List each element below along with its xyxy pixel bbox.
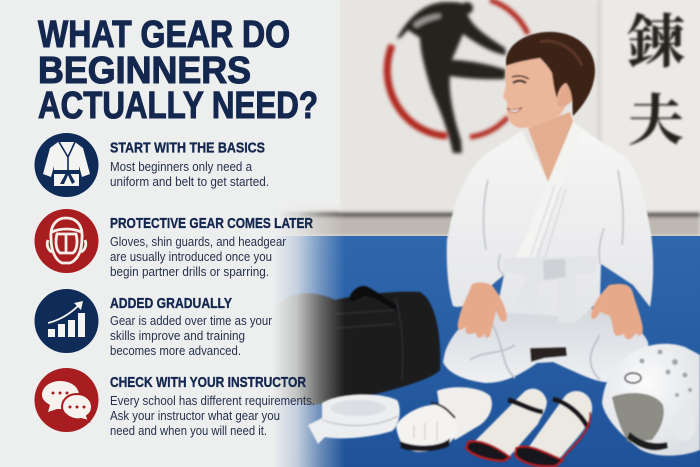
pants	[443, 308, 648, 383]
title: BEGINNERS	[38, 50, 251, 92]
left text panel fade	[0, 0, 345, 467]
icon: chat bubbles	[34, 368, 98, 432]
photo: shin guards	[466, 389, 592, 467]
step 3: added gradually: becomes more advanced.	[110, 344, 241, 358]
step 1: start with the basics: Most beginners only need a	[110, 160, 252, 174]
icon: rising bar chart	[34, 289, 98, 353]
lapels	[516, 122, 582, 260]
title	[38, 14, 318, 127]
step 2: protective gear comes later: PROTECTIVE GEAR COMES LATER	[110, 215, 313, 232]
wall kanji	[627, 0, 685, 157]
step 2: protective gear comes later: are usually introduced once you	[110, 250, 272, 264]
hands	[458, 282, 507, 338]
wall logo: kicking figure in red ring	[387, 0, 528, 153]
wall kanji: 夫	[628, 77, 684, 157]
step 1: start with the basics	[110, 140, 269, 189]
head	[503, 50, 573, 128]
step 1: start with the basics: START WITH THE BASICS	[110, 140, 265, 156]
step 2: protective gear comes later	[110, 215, 313, 279]
photo: rolled belt	[308, 394, 400, 444]
step 4: check with your instructor: CHECK WITH YOUR INSTRUCTOR	[110, 374, 306, 391]
step 4: check with your instructor: Every school has different requirements.	[110, 394, 315, 408]
icon: protective headgear	[34, 209, 98, 273]
step 3: added gradually: skills improve and training	[110, 329, 245, 343]
step 3: added gradually	[110, 295, 272, 358]
step 3: added gradually: ADDED GRADUALLY	[110, 295, 232, 312]
step 2: protective gear comes later: begin partner drills or sparring.	[110, 265, 269, 279]
step 4: check with your instructor: Ask your instructor what gear you	[110, 409, 280, 423]
step 1: start with the basics: uniform and belt to get started.	[110, 175, 269, 189]
wall panels	[280, 0, 700, 236]
title: WHAT GEAR DO	[38, 14, 290, 56]
step 3: added gradually: Gear is added over time as your	[110, 314, 272, 328]
photo: gym bag	[270, 286, 440, 405]
photo: boy in white gi	[443, 32, 653, 383]
eye, brow, mouth	[512, 76, 529, 79]
icon: karate uniform	[34, 133, 98, 197]
photo: sparring gloves	[396, 387, 492, 452]
title: ACTUALLY NEED?	[38, 85, 318, 127]
step 2: protective gear comes later: Gloves, shin guards, and headgear	[110, 235, 286, 249]
photo: white headgear	[602, 344, 700, 456]
step 4: check with your instructor: need and when you will need it.	[110, 424, 267, 438]
hair	[506, 32, 595, 116]
belt	[503, 256, 597, 323]
step 4: check with your instructor	[110, 374, 315, 438]
sleeves and jacket	[447, 122, 653, 320]
mat	[250, 236, 700, 467]
neck and chest	[528, 112, 573, 182]
ear	[557, 84, 575, 107]
